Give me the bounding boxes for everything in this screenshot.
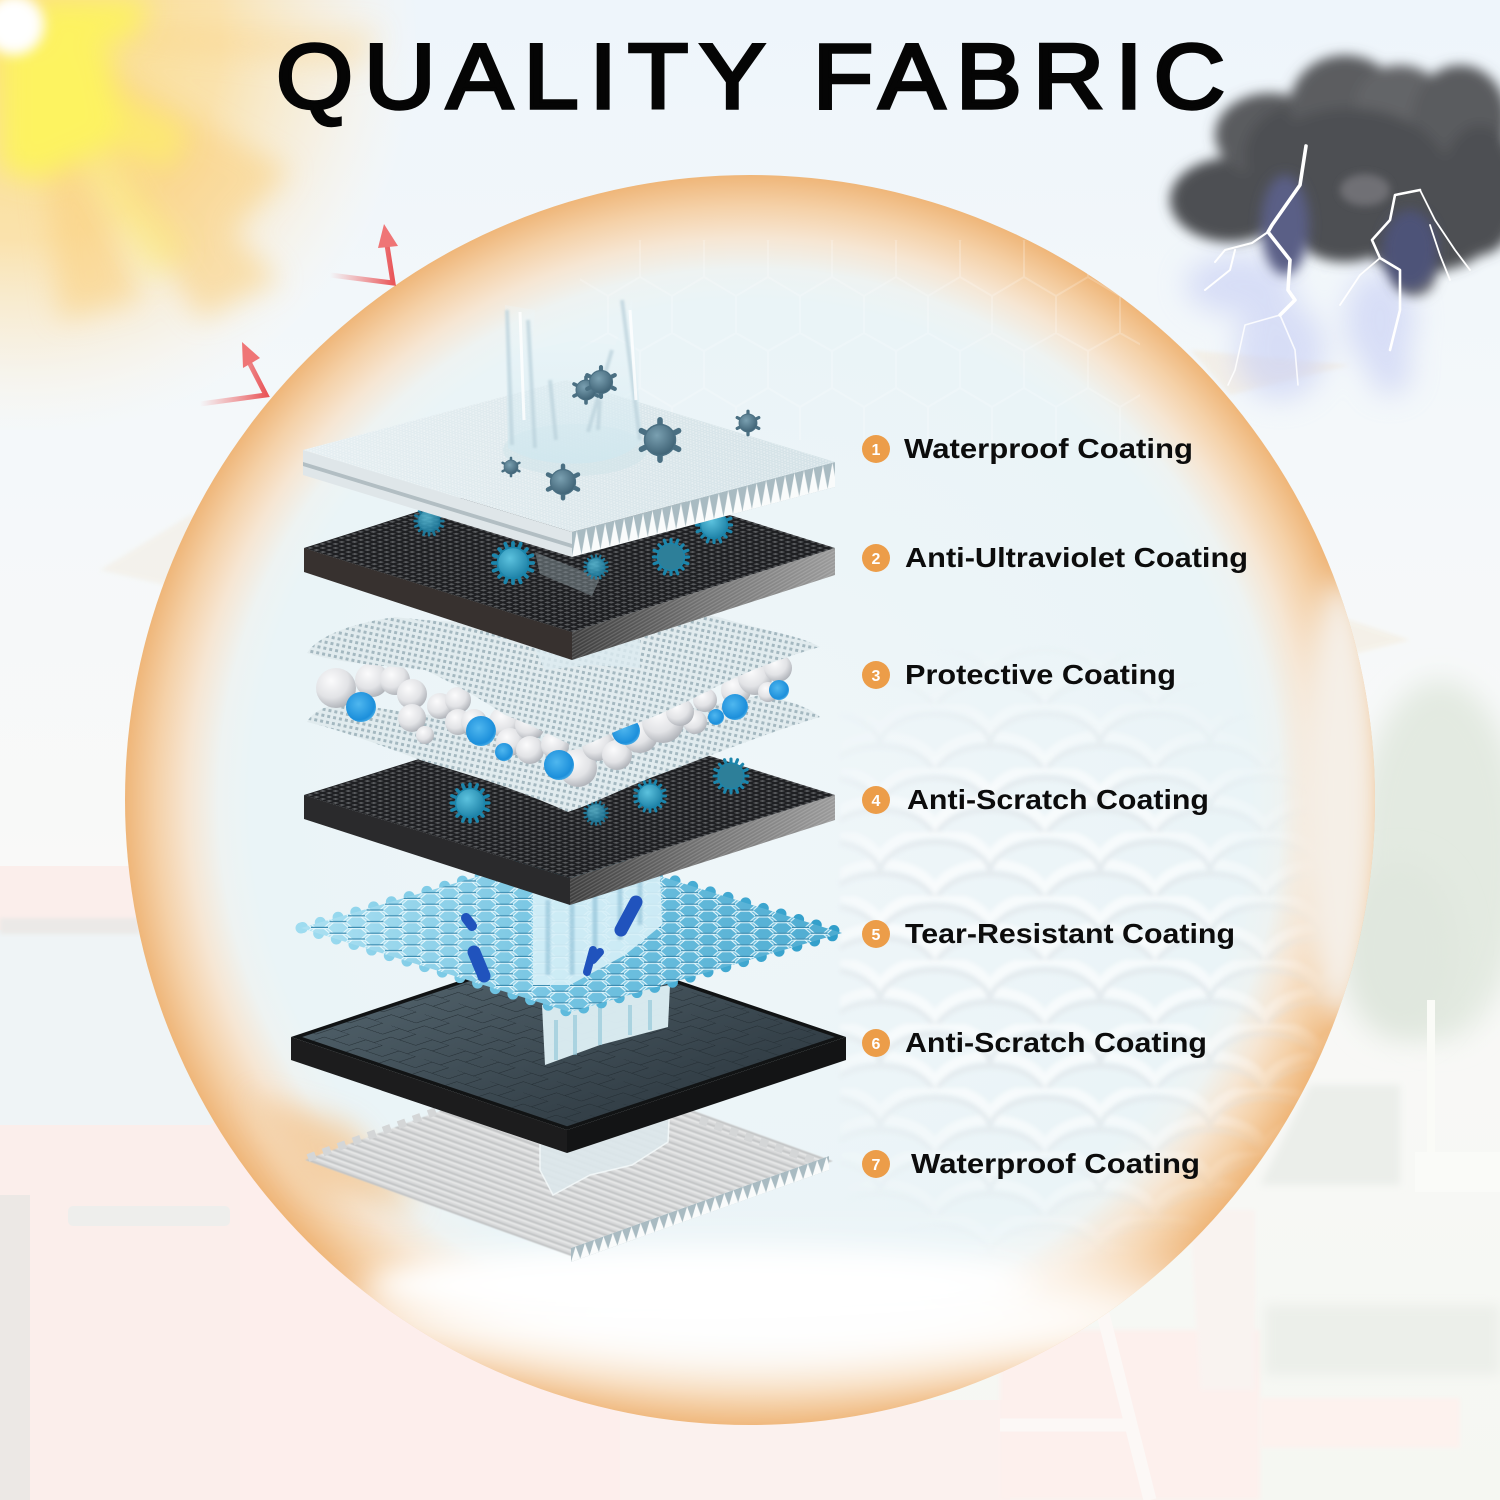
item 1: 1 [872,442,881,459]
falling water on layer 1 [503,298,647,476]
fabric layer 4: black mesh [304,712,835,905]
upper sheet [307,615,820,748]
title: QUALITY FABRIC [276,26,1236,128]
orange sphere panel [125,175,1380,1425]
item 7: Waterproof Coating [911,1148,1200,1179]
viruses on layer 2 [415,507,732,583]
water column below layer 6 [540,1100,670,1195]
fabric layer 6: dark scratch-resistant base [291,944,846,1153]
item 3: Protective Coating [905,659,1176,690]
red arrow upper [330,224,398,283]
water column between layers 5 and 6 [542,985,670,1065]
item 3: 3 [872,668,881,685]
item 7: 7 [872,1157,881,1174]
sun [0,0,430,430]
fabric layer 3: protective foam sheets with beads [307,615,820,812]
item 4: Anti-Scratch Coating [907,784,1209,815]
fabric layer 2: black mesh with viruses [304,464,835,660]
viruses on layer 1 [503,367,759,498]
item 2: 2 [872,551,881,568]
item 6: 6 [872,1036,881,1053]
red arrow lower [200,342,266,404]
item 1: Waterproof Coating [904,433,1193,464]
background: red truck [0,866,1460,1500]
storm cloud [1170,55,1500,400]
item 5: 5 [872,927,881,944]
item 5: Tear-Resistant Coating [905,918,1235,949]
beads [316,654,792,787]
background: tree and lawn [1260,680,1500,1375]
lightning [1205,146,1470,385]
item 2: Anti-Ultraviolet Coating [905,542,1248,573]
lower sheet [307,695,820,812]
item 4: 4 [872,793,881,810]
item 6: Anti-Scratch Coating [905,1027,1207,1058]
background: camping tent roof [100,350,1410,660]
fabric layer 5: blue hexagon mesh [301,849,842,1012]
legend [862,433,1248,1179]
fabric layer 7: bottom waterproof coating [305,1065,833,1262]
bacteria on layer 5 [466,902,636,976]
water column between layers 4 and 5 [533,870,662,985]
viruses on layer 4 [451,759,748,825]
water splash under layer 2 [530,640,640,670]
water below layer 1 [535,552,600,596]
fabric layer 1: top waterproof coating [303,380,835,557]
